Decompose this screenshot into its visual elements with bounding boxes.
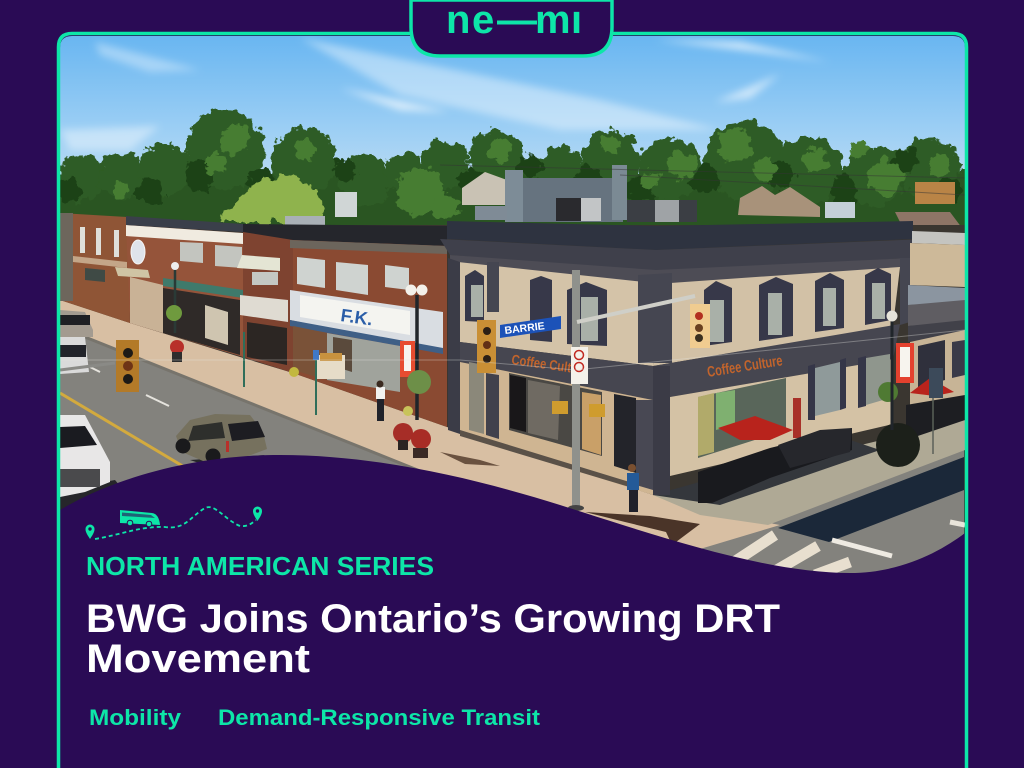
street photo <box>60 36 965 573</box>
storefront band <box>460 324 900 400</box>
title <box>86 597 780 681</box>
route icon <box>86 506 262 539</box>
dashed route <box>95 507 256 539</box>
store sign F.K. <box>290 290 443 352</box>
overhead wires <box>60 165 965 370</box>
flower planters <box>166 305 431 458</box>
curb line <box>85 337 420 470</box>
car: white pickup <box>60 415 110 497</box>
background houses <box>335 172 960 225</box>
start pin <box>86 524 94 539</box>
right sidewalk <box>653 420 965 525</box>
cars <box>60 310 267 515</box>
upper windows <box>297 257 409 295</box>
car: grey SUV <box>176 414 267 464</box>
left storefronts <box>60 213 447 427</box>
no-entry sign <box>571 347 588 384</box>
building C <box>243 228 293 373</box>
left storefronts: F.K. <box>339 305 374 329</box>
patio <box>698 428 852 503</box>
ground <box>64 225 965 534</box>
store windows <box>509 373 602 456</box>
sign text: coffee culture: Coffee Culture <box>706 352 784 381</box>
far right annex <box>876 231 965 467</box>
traffic lights and poles <box>60 270 710 511</box>
logo tab <box>411 0 612 56</box>
title: Movement <box>86 637 310 681</box>
building B <box>126 225 243 357</box>
series label: NORTH AMERICAN SERIES <box>86 551 434 581</box>
upper windows with shutters <box>465 268 891 346</box>
street lamps, posts and banners <box>171 262 914 430</box>
road <box>60 338 964 573</box>
title: BWG Joins Ontario’s Growing DRT <box>86 597 780 641</box>
trees <box>60 108 965 225</box>
corner building <box>440 221 927 503</box>
car shadows <box>60 480 118 510</box>
wave panel <box>60 455 965 768</box>
tag: Demand-Responsive Transit: Demand-Responsive Transit <box>218 705 541 730</box>
parked silver car <box>60 337 89 374</box>
clouds <box>60 38 830 150</box>
sign: Barrie St <box>500 316 561 338</box>
bus <box>120 510 160 527</box>
road markings <box>60 367 965 575</box>
end pin <box>253 506 262 521</box>
sign: Barrie St: BARRIE <box>504 320 545 337</box>
sky <box>60 36 965 174</box>
sidewalk shadows <box>585 512 700 542</box>
lower walls <box>670 359 893 476</box>
left and corner sidewalk <box>60 300 780 552</box>
shaded road on the right <box>778 457 964 542</box>
rooftop equipment <box>285 165 697 228</box>
pedestrians <box>376 380 639 512</box>
corner building: Coffee Cult <box>511 351 572 375</box>
red umbrella <box>718 416 793 440</box>
building A <box>60 213 130 323</box>
parked tan car <box>60 310 93 337</box>
building D <box>293 232 447 427</box>
tag: Mobility: Mobility <box>89 705 182 730</box>
